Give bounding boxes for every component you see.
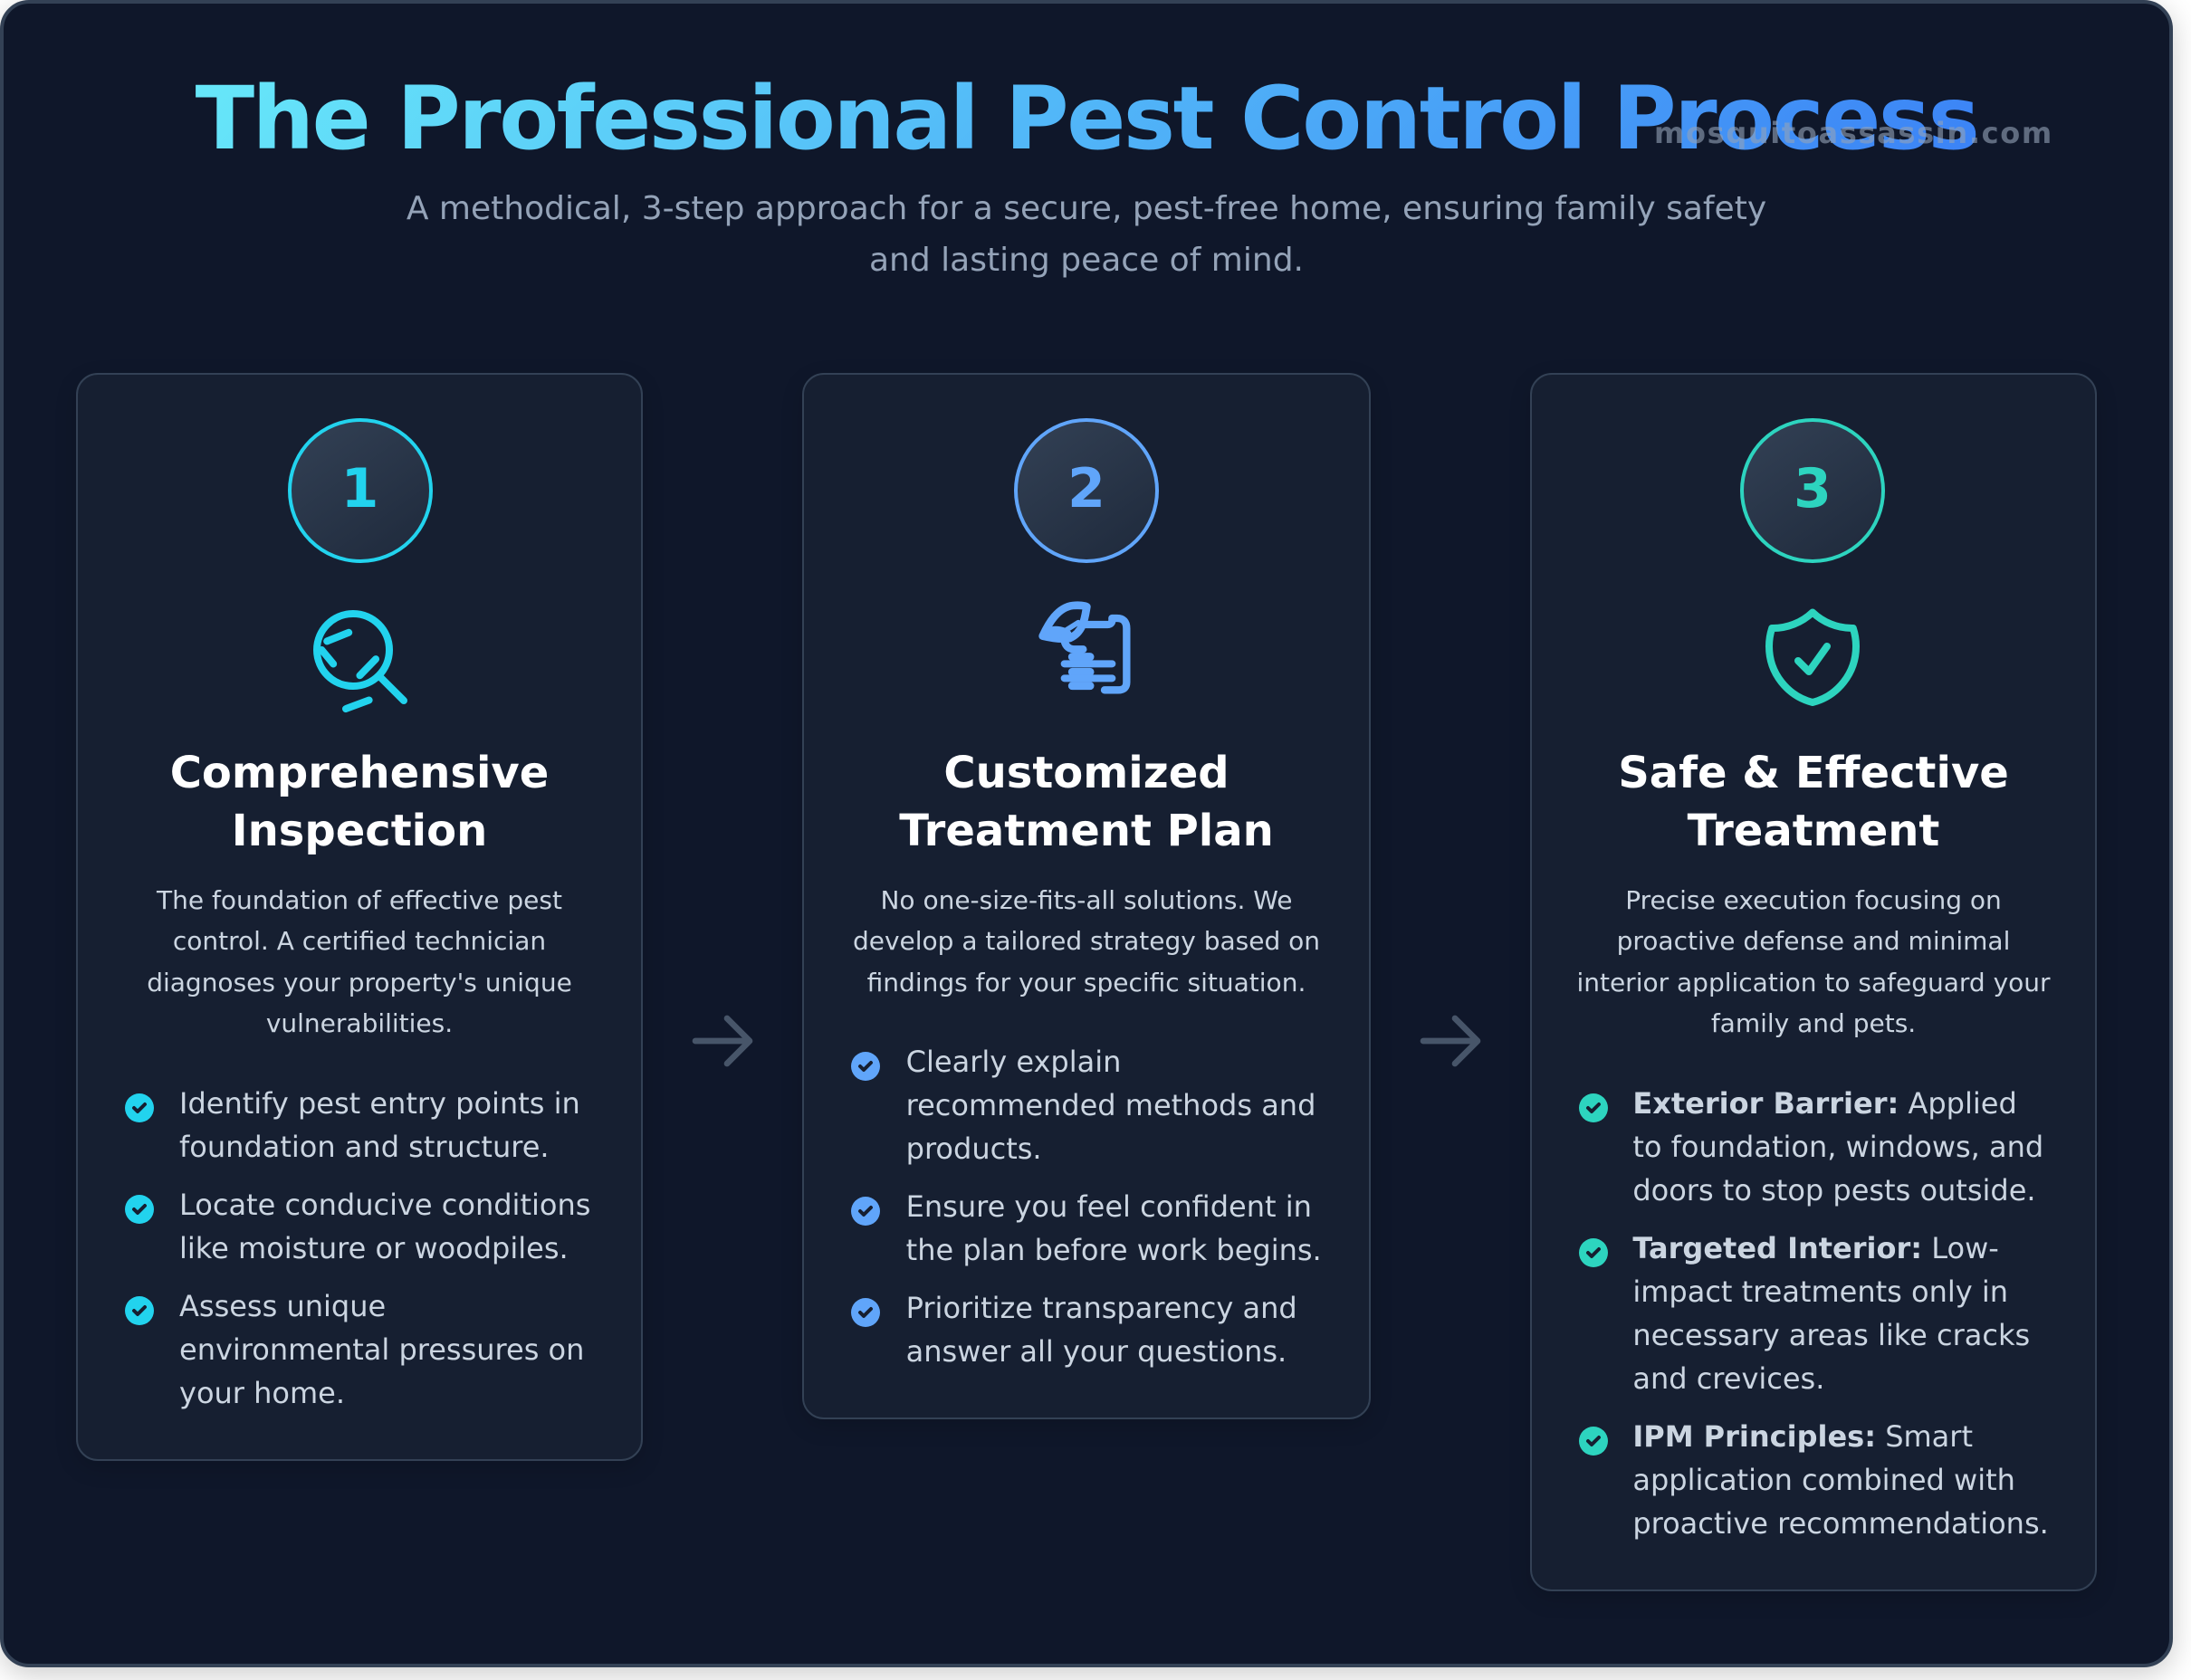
step 3 checklist [1579, 1086, 2049, 1541]
step 2 checklist: recommended methods and [906, 1088, 1316, 1122]
step 2 number badge: 2 [1067, 457, 1105, 520]
step 2 checklist: Prioritize transparency and [906, 1291, 1297, 1325]
step 1 checklist: like moisture or woodpiles. [179, 1231, 569, 1265]
step 3 heading: Safe & Effective [1618, 748, 2009, 798]
step 3 checklist: impact treatments only in [1632, 1274, 2008, 1309]
step 3 heading [1618, 748, 2009, 856]
step 3 checklist: IPM Principles: Smart [1632, 1419, 1973, 1454]
step 3 description: Precise execution focusing on [1625, 885, 2002, 915]
subtitle: and lasting peace of mind. [869, 242, 1304, 279]
step 2 checklist [851, 1045, 1322, 1369]
step 1 description: The foundation of effective pest [157, 885, 562, 915]
step 1 heading: Comprehensive [170, 748, 549, 798]
panel: step 1 comprehensive inspection [76, 373, 643, 1461]
step 2 description [853, 885, 1320, 998]
step 1 checklist: foundation and structure. [179, 1130, 550, 1164]
step 2 description: develop a tailored strategy based on [853, 926, 1320, 956]
step 2 checklist: the plan before work begins. [906, 1233, 1322, 1267]
step 2 description: findings for your specific situation. [867, 968, 1306, 998]
step 1 heading: Inspection [232, 806, 487, 856]
step 2 checklist: products. [906, 1131, 1042, 1166]
step 1 description: vulnerabilities. [266, 1008, 453, 1038]
panel: step 3 safe and effective treatment [1530, 373, 2097, 1591]
step 1 checklist: Identify pest entry points in [179, 1086, 580, 1121]
step 3 checklist: proactive recommendations. [1632, 1506, 2049, 1541]
step 1 description: diagnoses your property's unique [147, 968, 572, 998]
step 1 heading [170, 748, 549, 856]
step 2 heading: Customized [943, 748, 1229, 798]
step 2 checklist: Clearly explain [906, 1045, 1121, 1079]
step 1 description [147, 885, 572, 1038]
step 1 checklist: your home. [179, 1376, 345, 1410]
step 1 number badge [288, 418, 433, 563]
step 2 number badge [1014, 418, 1159, 563]
step 2 heading [899, 748, 1274, 856]
panel: step 2 customized treatment plan [802, 373, 1371, 1419]
step 2 checklist: answer all your questions. [906, 1334, 1287, 1369]
step 1 number badge: 1 [341, 457, 378, 520]
icon: magnifying glass [313, 610, 407, 713]
step 3 number badge [1740, 418, 1885, 563]
step 3 number badge: 3 [1794, 457, 1832, 520]
step 3 description: family and pets. [1711, 1008, 1916, 1038]
step 2 heading: Treatment Plan [899, 806, 1274, 856]
step 3 checklist: necessary areas like cracks [1632, 1318, 2030, 1352]
step 2 checklist: Ensure you feel confident in [906, 1189, 1312, 1224]
step 3 checklist: and crevices. [1632, 1361, 1824, 1396]
step 1 checklist [125, 1086, 590, 1410]
step 3 description: proactive defense and minimal [1617, 926, 2010, 956]
step 3 checklist: Targeted Interior: Low- [1632, 1231, 1999, 1265]
step 2 description: No one-size-fits-all solutions. We [880, 885, 1293, 915]
arrow: step 2 to step 3 [1420, 1016, 1481, 1066]
step 1 checklist: Locate conducive conditions [179, 1188, 590, 1222]
title: The Professional Pest Control Process [196, 68, 1977, 169]
step 3 checklist: Exterior Barrier: Applied [1632, 1086, 2017, 1121]
step 3 description [1576, 885, 2051, 1038]
step 3 checklist: to foundation, windows, and [1632, 1130, 2043, 1164]
step 3 checklist: application combined with [1632, 1463, 2015, 1497]
step 1 checklist: environmental pressures on [179, 1332, 584, 1367]
subtitle [407, 190, 1766, 279]
subtitle: A methodical, 3-step approach for a secure, pest-free home, ensuring family safety [407, 190, 1766, 227]
watermark: mosquitoassassin.com [1654, 116, 2053, 150]
step 1 description: control. A certified technician [173, 926, 546, 956]
step 1 checklist: Assess unique [179, 1289, 386, 1323]
step 3 description: interior application to safeguard your [1576, 968, 2051, 998]
step 3 checklist: doors to stop pests outside. [1632, 1173, 2036, 1208]
step 3 heading: Treatment [1688, 806, 1939, 856]
icon: leaf and document [1038, 601, 1130, 693]
icon: shield with check [1765, 608, 1860, 706]
arrow: step 1 to step 2 [692, 1016, 753, 1066]
